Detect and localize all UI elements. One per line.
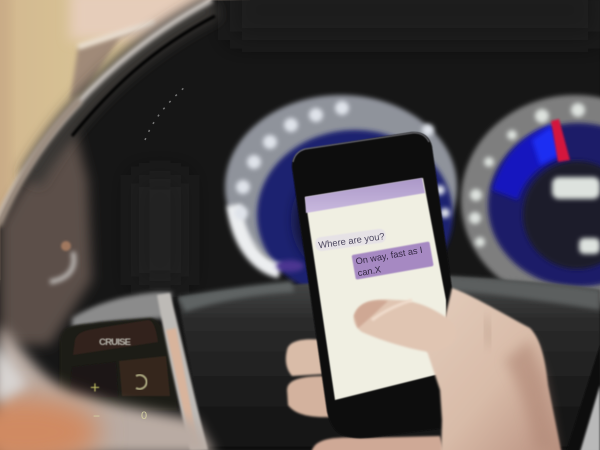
purple header bar bbox=[305, 178, 425, 213]
phone bbox=[292, 132, 453, 438]
knuckle shadow bbox=[485, 318, 490, 346]
steering wheel controls bbox=[60, 292, 208, 450]
plus button bbox=[70, 362, 118, 397]
right gauge bbox=[461, 95, 600, 305]
back button bbox=[119, 356, 170, 396]
palm bbox=[420, 288, 562, 450]
cruise button bbox=[73, 320, 158, 355]
outgoing message bubble: On way, fast as I bbox=[355, 245, 423, 266]
hand holding phone bbox=[354, 288, 562, 450]
fingers behind phone bbox=[286, 339, 445, 450]
palm shading bbox=[505, 340, 556, 450]
minus label: − bbox=[93, 409, 100, 423]
right spoke corner bbox=[565, 345, 600, 450]
blurred shoulder, bottom left foreground bbox=[0, 325, 215, 450]
left gauge bbox=[225, 95, 457, 300]
phone body bbox=[292, 132, 453, 438]
chrome spoke bbox=[157, 293, 208, 450]
wheel clip detail bbox=[50, 241, 74, 282]
zero label: 0 bbox=[141, 410, 147, 422]
cruise label: CRUISE bbox=[99, 337, 131, 348]
return symbol bbox=[136, 375, 147, 389]
thumb highlight bbox=[372, 300, 412, 320]
blurred hand background, top left bbox=[0, 0, 250, 280]
outgoing message bubble: can.X bbox=[357, 264, 382, 278]
outgoing message bubble bbox=[352, 241, 434, 280]
incoming message bubble: Where are you? bbox=[318, 230, 385, 250]
thumb bbox=[354, 300, 456, 352]
sleeve highlight bbox=[70, 22, 155, 100]
steering wheel hub bbox=[178, 276, 600, 450]
plus symbol: + bbox=[90, 378, 100, 397]
screen bbox=[305, 178, 447, 400]
steering wheel rim bbox=[0, 0, 215, 345]
red needle bbox=[551, 119, 570, 162]
thumb nail bbox=[354, 300, 388, 328]
